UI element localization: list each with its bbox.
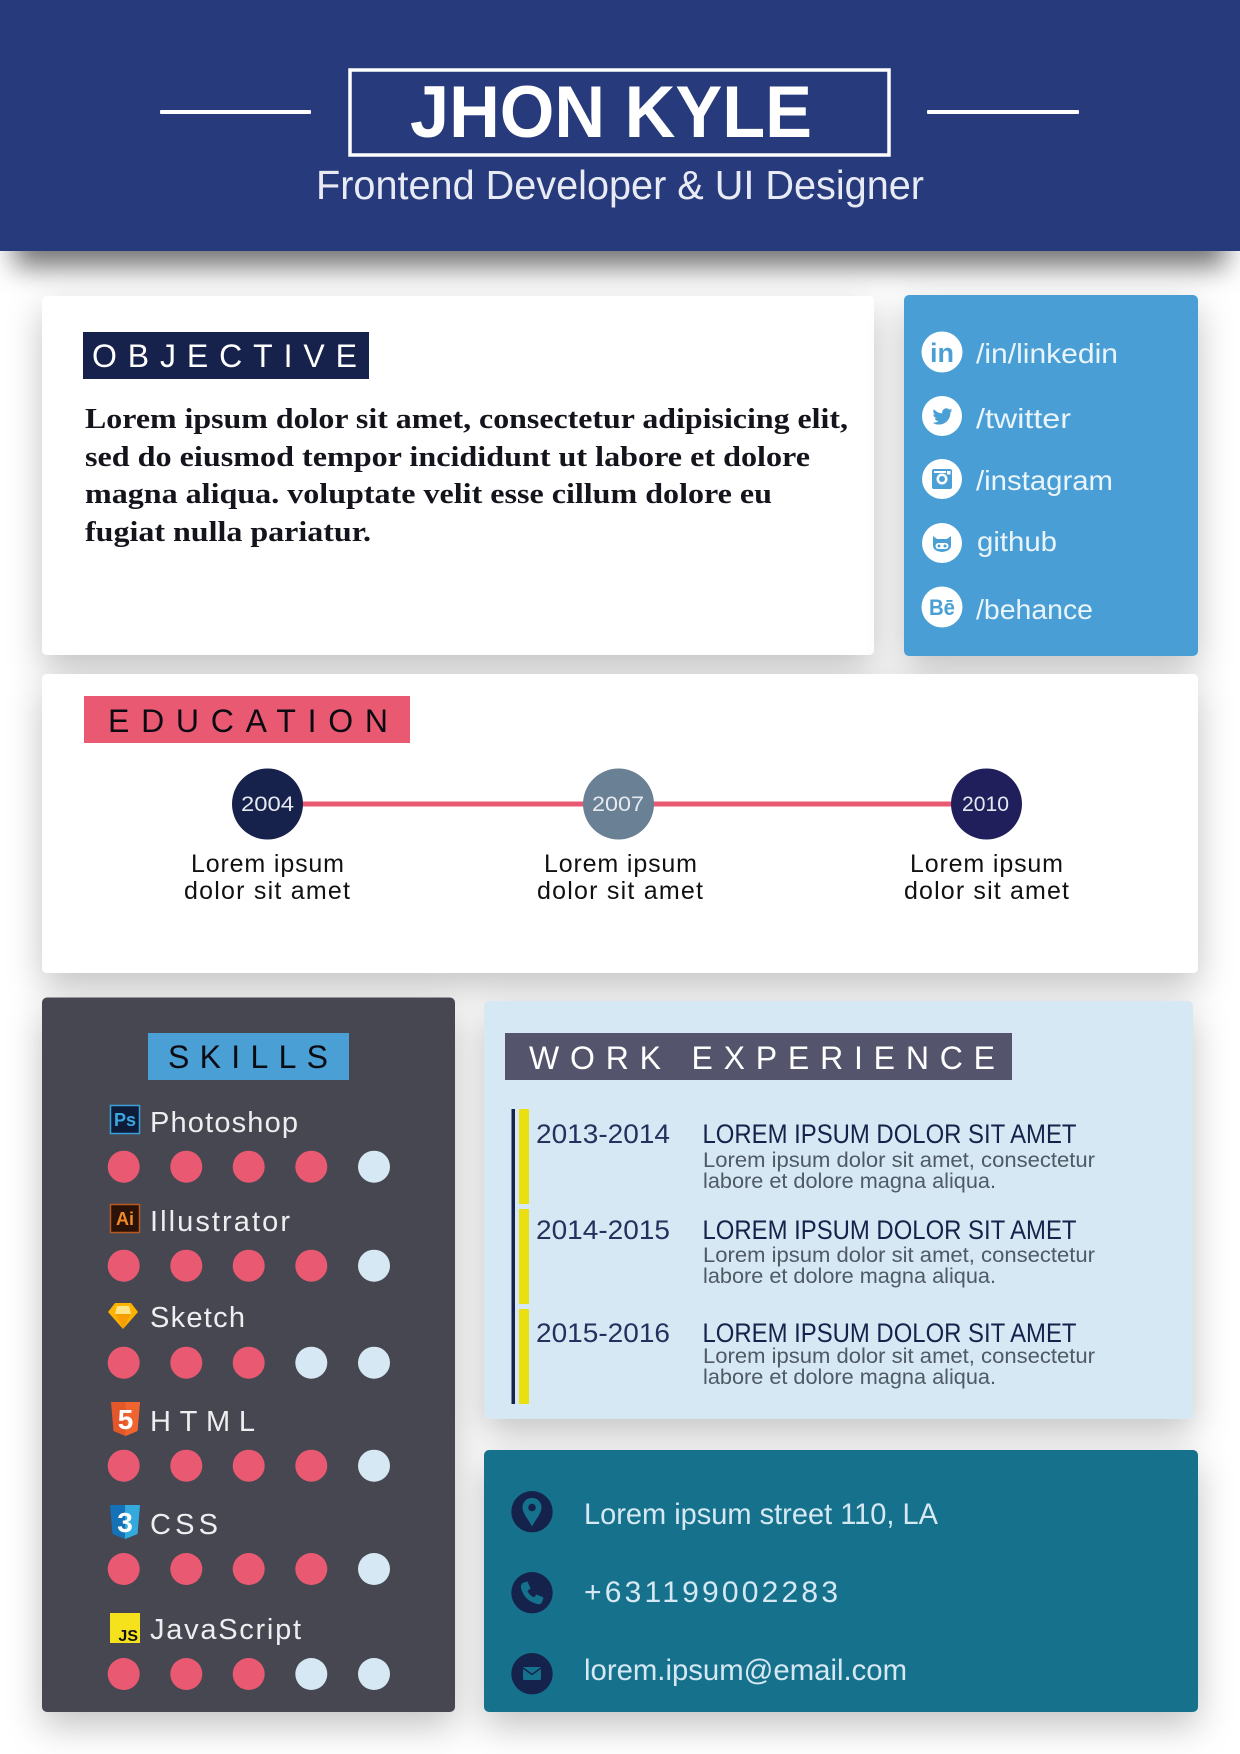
panel: objective — [42, 296, 874, 655]
icon: behance — [922, 586, 962, 628]
timeline item 2010: dolor sit amet — [904, 877, 1069, 905]
job 2015-2016 — [536, 1318, 1095, 1389]
job 2014-2015: LOREM IPSUM DOLOR SIT AMET — [702, 1215, 1076, 1245]
heading: work experience: WORK EXPERIENCE — [529, 1040, 995, 1076]
icon: location pin — [511, 1491, 553, 1532]
timeline item 2007: 2007 — [592, 793, 644, 816]
panel: contact — [484, 1450, 1198, 1712]
job 2015-2016: 2015-2016 — [536, 1318, 670, 1348]
link: linkedin: /in/linkedin — [976, 338, 1118, 369]
subtitle: Frontend Developer & UI Designer — [316, 162, 924, 208]
email: lorem.ipsum@email.com — [584, 1654, 907, 1687]
job 2013-2014 — [536, 1119, 1095, 1193]
timeline item 2010: Lorem ipsum — [910, 850, 1063, 878]
timeline item 2007: Lorem ipsum — [544, 850, 697, 878]
heading: education: EDUCATION — [108, 703, 388, 739]
objective body text: sed do eiusmod tempor incididunt ut labore et dolore — [85, 441, 810, 473]
job 2013-2014: 2013-2014 — [536, 1119, 670, 1149]
timeline rail — [512, 1109, 529, 1404]
timeline item 2010 — [904, 768, 1069, 905]
heading: skills: SKILLS — [168, 1039, 328, 1075]
header banner — [0, 0, 1240, 251]
panel: social links — [904, 295, 1198, 656]
link: github: github — [977, 526, 1057, 557]
address: Lorem ipsum street 110, LA — [584, 1498, 938, 1531]
link: behance: /behance — [976, 594, 1093, 625]
skill: html: 5 — [118, 1404, 133, 1435]
job 2013-2014: labore et dolore magna aliqua. — [703, 1170, 996, 1193]
icon: linkedin — [922, 332, 962, 372]
skill: css: 3 — [117, 1507, 133, 1538]
icon: phone — [511, 1572, 553, 1613]
job 2014-2015 — [536, 1215, 1095, 1288]
skill: photoshop — [108, 1106, 390, 1183]
timeline item 2004 — [184, 768, 350, 905]
job 2015-2016: Lorem ipsum dolor sit amet, consectetur — [703, 1345, 1095, 1368]
objective body text: Lorem ipsum dolor sit amet, consectetur adipisicing elit, — [85, 403, 848, 435]
job 2015-2016: LOREM IPSUM DOLOR SIT AMET — [702, 1318, 1076, 1348]
timeline item 2007: dolor sit amet — [537, 877, 703, 905]
icon: linkedin: in — [930, 338, 954, 368]
timeline item 2004: dolor sit amet — [184, 877, 350, 905]
heading: objective: OBJECTIVE — [92, 338, 357, 374]
icon: github — [922, 523, 962, 563]
icon: behance: Bē — [929, 595, 955, 620]
skill: illustrator: Ai — [116, 1209, 134, 1229]
panel: skills — [42, 998, 455, 1712]
panel: education — [42, 674, 1198, 973]
title: name box: JHON KYLE — [410, 72, 812, 153]
timeline item 2004: Lorem ipsum — [191, 850, 344, 878]
skill: html: HTML — [150, 1406, 255, 1438]
job 2014-2015: labore et dolore magna aliqua. — [703, 1265, 996, 1288]
heading: education — [84, 696, 410, 743]
phone number: +631199002283 — [584, 1576, 838, 1609]
job 2015-2016: labore et dolore magna aliqua. — [703, 1366, 996, 1389]
objective body text: fugiat nulla pariatur. — [85, 516, 371, 548]
skill: javascript — [108, 1613, 390, 1690]
skill: javascript: JavaScript — [150, 1614, 301, 1646]
timeline connector — [300, 802, 990, 806]
skill: illustrator — [108, 1204, 390, 1282]
icon: twitter — [922, 396, 962, 436]
job 2013-2014: Lorem ipsum dolor sit amet, consectetur — [703, 1149, 1095, 1172]
timeline item 2007 — [537, 768, 703, 905]
job 2013-2014: LOREM IPSUM DOLOR SIT AMET — [702, 1119, 1076, 1149]
skill: illustrator: Illustrator — [150, 1206, 290, 1238]
link: instagram: /instagram — [976, 465, 1113, 496]
icon: mail — [511, 1653, 553, 1694]
link: twitter: /twitter — [976, 403, 1071, 434]
skill: sketch: Sketch — [150, 1302, 245, 1334]
skill: photoshop: Ps — [114, 1110, 136, 1130]
skill: javascript: JS — [118, 1628, 138, 1645]
job 2014-2015: Lorem ipsum dolor sit amet, consectetur — [703, 1244, 1095, 1267]
skill: photoshop: Photoshop — [150, 1107, 298, 1139]
icon: instagram — [922, 459, 962, 499]
objective body text — [85, 403, 848, 548]
timeline item 2004: 2004 — [241, 793, 294, 816]
job 2014-2015: 2014-2015 — [536, 1215, 670, 1245]
panel: work experience — [484, 1001, 1193, 1419]
heading: skills — [148, 1033, 349, 1080]
skill: sketch — [108, 1302, 390, 1379]
skill: css: CSS — [150, 1509, 218, 1541]
skill: css — [108, 1505, 390, 1585]
timeline item 2010: 2010 — [962, 793, 1009, 816]
objective body text: magna aliqua. voluptate velit esse cillum dolore eu — [85, 478, 772, 510]
skill: html — [108, 1402, 390, 1482]
